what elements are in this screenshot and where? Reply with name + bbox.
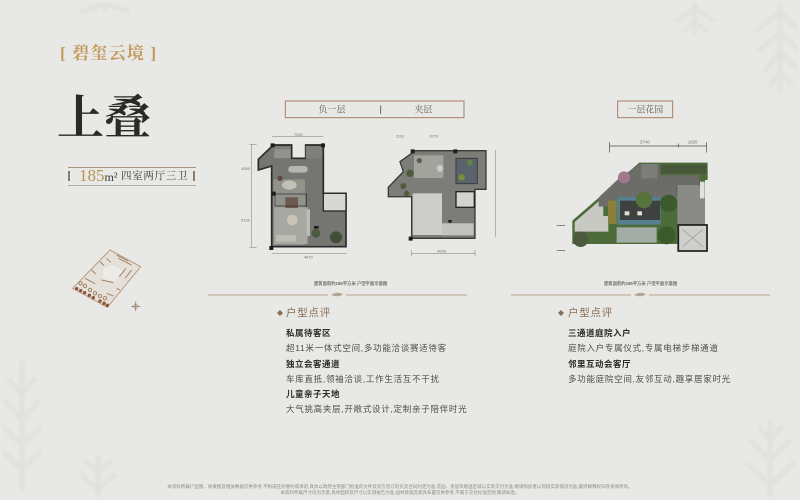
heading: 户型点评 bbox=[568, 307, 613, 319]
dimensions: garden: 1820 bbox=[688, 140, 698, 145]
plan: garden bbox=[572, 163, 708, 252]
area prefix marks bbox=[68, 171, 70, 181]
frame: garden label bbox=[618, 101, 673, 118]
dimensions: basement bbox=[241, 132, 347, 259]
plan: mezzanine bbox=[388, 149, 486, 241]
point 3 title: 儿童亲子天地 bbox=[286, 389, 340, 399]
title: 上叠 bbox=[57, 93, 151, 145]
point 3 text: 大气挑高夹层,开敞式设计,定制亲子陪伴时光 bbox=[286, 404, 467, 414]
bullet: right heading bbox=[558, 310, 564, 316]
frame: basement and mezzanine label: 负一层 bbox=[319, 104, 345, 115]
area value: 185m² bbox=[79, 166, 117, 185]
dimensions: basement: 7290 bbox=[294, 132, 304, 137]
divider: right bbox=[511, 293, 770, 296]
dimensions: garden: 5740 bbox=[640, 140, 650, 145]
dimensions: basement: 4590 bbox=[241, 166, 251, 171]
room layout: 四室两厅三卫 bbox=[121, 171, 188, 182]
heading: 户型点评 bbox=[286, 307, 331, 319]
point 1 title: 私属待客区 bbox=[286, 328, 331, 338]
frame: basement and mezzanine label: 夹层 bbox=[414, 104, 432, 115]
frame: basement and mezzanine label bbox=[285, 101, 464, 118]
project name tag: [ 碧玺云境 ] bbox=[60, 44, 157, 63]
bullet: left heading bbox=[277, 310, 283, 316]
end mark bbox=[193, 171, 195, 181]
point 1 text: 庭院入户专属仪式,专属电梯步梯通道 bbox=[568, 343, 719, 353]
point 2 text: 多功能庭院空间,友邻互动,趣享居家时光 bbox=[568, 374, 731, 384]
point 1 text: 超11米一体式空间,多功能洽谈赛适待客 bbox=[286, 343, 447, 353]
footer disclaimer bbox=[167, 484, 633, 495]
footer disclaimer: 本资料所载户型图、效果图及相关数据仅供参考,不构成任何要约或承诺,具体以政府主管部门批准的文件及双方签订的买卖合同约定为准,花园、夹层等赠送区域以实际交付为准,敬请购房者以现场实际情况为准,最终解释权归开发商所有。 bbox=[167, 484, 633, 489]
divider: left bbox=[208, 293, 467, 296]
dimensions: mezzanine bbox=[396, 134, 496, 256]
floor plan: first floor garden bbox=[557, 101, 708, 287]
area and layout band bbox=[68, 167, 196, 186]
dimensions: mezzanine: 4690 bbox=[437, 249, 447, 254]
point 2 title: 邻里互动会客厅 bbox=[568, 359, 631, 369]
dimensions: basement: 5190 bbox=[241, 218, 251, 223]
dimensions: basement: 4870 bbox=[304, 254, 314, 259]
panel: left commentary bbox=[286, 307, 467, 414]
plan caption: 建筑面积约185平方米 户型平面示意图 bbox=[314, 280, 387, 287]
panel: right commentary bbox=[568, 307, 731, 384]
footer disclaimer: 本资料所载尺寸均为示意,具体面积及尺寸以实测报告为准,园林景观及家具布置仅供参考,不属于交付标准范围,敬请知悉。 bbox=[280, 490, 520, 494]
dimensions: mezzanine: 3270 bbox=[429, 134, 439, 139]
dimensions: garden bbox=[557, 140, 707, 251]
frame: garden label: 一层花园 bbox=[627, 104, 663, 115]
point 2 text: 车库直抵,领袖洽谈,工作生活互不干扰 bbox=[286, 374, 440, 384]
dimensions: mezzanine: 1110 bbox=[396, 134, 405, 139]
plan: basement bbox=[258, 143, 346, 250]
point 2 title: 独立会客通道 bbox=[286, 359, 340, 369]
point 1 title: 三通道庭院入户 bbox=[568, 328, 631, 338]
plan caption: 建筑面积约185平方米 户型平面示意图 bbox=[604, 280, 677, 287]
floor plan: basement and mezzanine bbox=[241, 101, 496, 287]
